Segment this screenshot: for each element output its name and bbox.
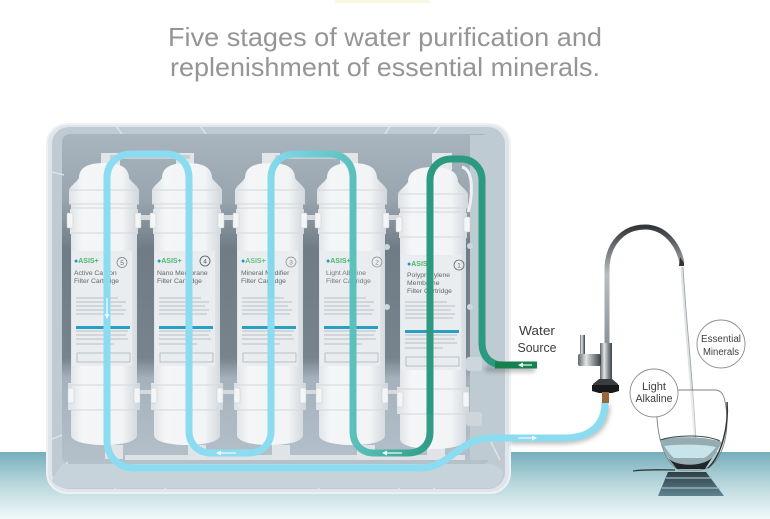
label: water source: Source	[518, 340, 556, 355]
filter cartridge 3: Mineral Modifier: ●ASIS+	[241, 258, 266, 265]
top accent strip	[335, 0, 430, 3]
glass reflection	[633, 470, 724, 496]
filter cartridge 3: Mineral Modifier	[233, 163, 307, 445]
countertop surface	[0, 452, 770, 519]
filter cartridge 1: Polypropylene Membrane: ●ASIS+	[407, 261, 432, 268]
filter cartridge 4: Nano Membrane: Filter Cartridge	[157, 278, 202, 285]
callout: essential minerals: Essential	[701, 334, 741, 345]
filter cartridge 4: Nano Membrane	[150, 163, 224, 445]
filter cartridge 1: Polypropylene Membrane: 1	[457, 262, 461, 270]
water path: stages 3 to 5 and outlet to tap	[107, 154, 605, 468]
callout: essential minerals: Minerals	[703, 347, 739, 358]
filter cartridge 1: Polypropylene Membrane: Membrane	[407, 280, 440, 287]
filter cartridge 2: Light Alkaline: 2	[375, 260, 379, 266]
filter cartridge 5: Active Carbon	[67, 163, 141, 445]
callout: essential minerals	[697, 320, 745, 368]
filter cartridge 1: Polypropylene Membrane: Polypropylene	[407, 272, 450, 279]
wall mounts	[384, 243, 482, 426]
filter cartridge 1: Polypropylene Membrane: Filter Cartridge	[407, 288, 452, 295]
filter cartridge 2: Light Alkaline: ●ASIS+	[326, 258, 351, 265]
title: replenishment of essential minerals.	[170, 52, 600, 82]
filter cartridge 2: Light Alkaline: Filter Cartridge	[326, 278, 371, 285]
filter cartridge 5: Active Carbon: 5	[120, 260, 124, 267]
water path: source through stage 1	[353, 159, 537, 453]
filter cartridge 4: Nano Membrane: 4	[203, 258, 207, 266]
purifier tray	[47, 124, 510, 493]
filter cartridge 5: Active Carbon: ●ASIS+	[74, 258, 99, 265]
filter cartridge 3: Mineral Modifier: Filter Cartridge	[241, 278, 286, 285]
label: water source	[518, 323, 556, 355]
filter cartridge 1: Polypropylene Membrane	[396, 167, 470, 449]
water stream	[682, 267, 696, 442]
icon: glass of water	[657, 390, 727, 470]
callout: light alkaline: Light	[642, 381, 666, 393]
filter cartridge 2: Light Alkaline	[315, 163, 389, 445]
filter cartridge 5: Active Carbon: Active Carbon	[74, 270, 117, 277]
label: water source: Water	[519, 323, 556, 338]
callout: light alkaline: Alkaline	[636, 393, 672, 405]
filter cartridge 2: Light Alkaline: Light Alkaline	[326, 270, 366, 277]
filter cartridge 4: Nano Membrane: Nano Membrane	[157, 270, 208, 277]
flow arrows	[104, 298, 537, 456]
filter cartridge 3: Mineral Modifier: Mineral Modifier	[241, 270, 290, 277]
filter cartridge 5: Active Carbon: Filter Cartridge	[74, 278, 119, 285]
connector pipes	[101, 153, 471, 460]
title: Five stages of water purification and	[168, 22, 602, 52]
icon: faucet	[578, 227, 684, 403]
title	[168, 22, 602, 82]
tube shadows outside tray	[485, 369, 607, 441]
water path: stages 2 to 3	[271, 154, 353, 402]
filter cartridge 4: Nano Membrane: ●ASIS+	[157, 258, 182, 265]
filter cartridge 3: Mineral Modifier: 3	[289, 260, 293, 266]
callout: light alkaline	[630, 369, 678, 417]
